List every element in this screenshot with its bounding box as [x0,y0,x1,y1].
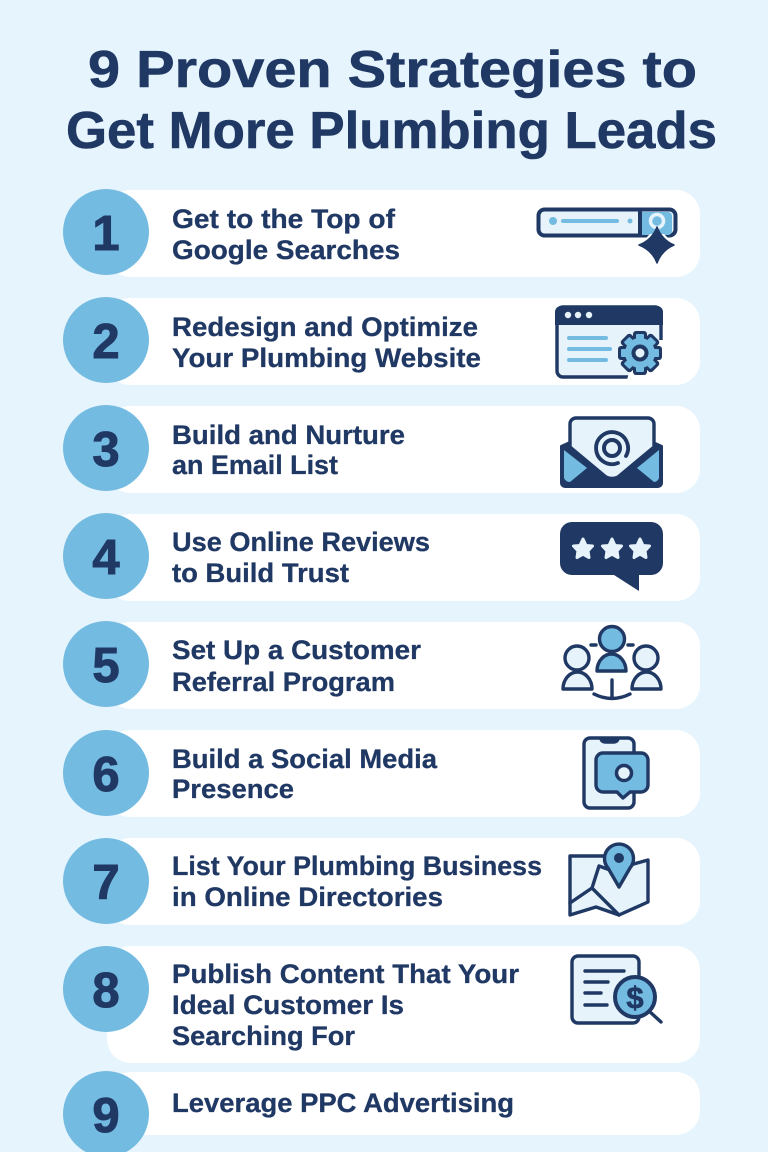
number badge 5: 5 [92,639,120,693]
icon: email envelope [561,418,662,487]
panel: strategy 7 [63,838,700,925]
number badge 6: 6 [92,748,120,802]
heading: strategy 5: Referral Program [172,667,395,697]
number badge 9 [63,1071,149,1152]
number badge 2 [63,297,149,383]
heading: strategy 4: to Build Trust [172,558,349,588]
panel: strategy 6 [63,730,700,817]
panel: strategy 8 [63,946,700,1063]
heading: strategy 8: Searching For [172,1021,355,1051]
icon: referral people group [563,626,661,698]
number badge 8: 8 [92,964,120,1018]
panel: strategy 5 [63,621,700,709]
heading: strategy 7: List Your Plumbing Business [172,851,542,881]
panel: strategy 9 [63,1071,700,1152]
number badge 5 [63,621,149,707]
heading: strategy 4 [172,527,430,588]
number badge 4: 4 [92,531,120,585]
heading: strategy 6 [172,744,438,804]
icon: review speech bubble with stars [560,522,663,591]
number badge 7 [63,838,149,924]
icon: document with dollar magnifier [572,956,661,1023]
heading: strategy 1 [172,204,400,265]
number badge 9: 9 [92,1089,120,1143]
heading: strategy 7 [172,851,542,912]
title [66,41,717,160]
number badge 7: 7 [92,856,120,910]
number badge 3 [63,405,149,491]
number badge 1: 1 [92,207,120,261]
panel: strategy 1 [63,189,700,277]
icon: browser window with gear [555,306,665,380]
panel: strategy 4 [63,513,700,601]
heading: strategy 3 [172,420,405,480]
heading: strategy 3: Build and Nurture [172,420,405,450]
number badge 2: 2 [92,315,120,369]
number badge 8 [63,946,149,1032]
number badge 4 [63,513,149,599]
heading: strategy 8: Ideal Customer Is [172,990,404,1020]
heading: strategy 2: Redesign and Optimize [172,312,478,342]
heading: strategy 8 [172,959,519,1051]
title: 9 Proven Strategies to [88,41,697,99]
heading: strategy 6: Presence [172,774,294,804]
heading: strategy 2 [172,312,481,373]
title: Get More Plumbing Leads [66,102,717,160]
heading: strategy 1: Google Searches [172,235,400,265]
number badge 1 [63,189,149,275]
heading: strategy 3: an Email List [172,450,338,480]
panel: strategy 3 [63,405,700,493]
heading: strategy 6: Build a Social Media [172,744,438,774]
icon: document with dollar magnifier: $ [626,980,644,1015]
icon: phone with chat bubble [584,738,648,808]
number badge 3: 3 [92,423,120,477]
heading: strategy 8: Publish Content That Your [172,959,519,989]
heading: strategy 9: Leverage PPC Advertising [172,1088,514,1118]
panel: strategy 2 [63,297,700,385]
heading: strategy 5 [172,635,421,697]
icon: map with location pin [570,844,648,915]
heading: strategy 4: Use Online Reviews [172,527,430,557]
number badge 6 [63,730,149,816]
heading: strategy 2: Your Plumbing Website [172,343,481,373]
heading: strategy 1: Get to the Top of [172,204,396,234]
icon: search bar with sparkle [538,209,676,263]
heading: strategy 5: Set Up a Customer [172,635,421,665]
heading: strategy 7: in Online Directories [172,882,443,912]
